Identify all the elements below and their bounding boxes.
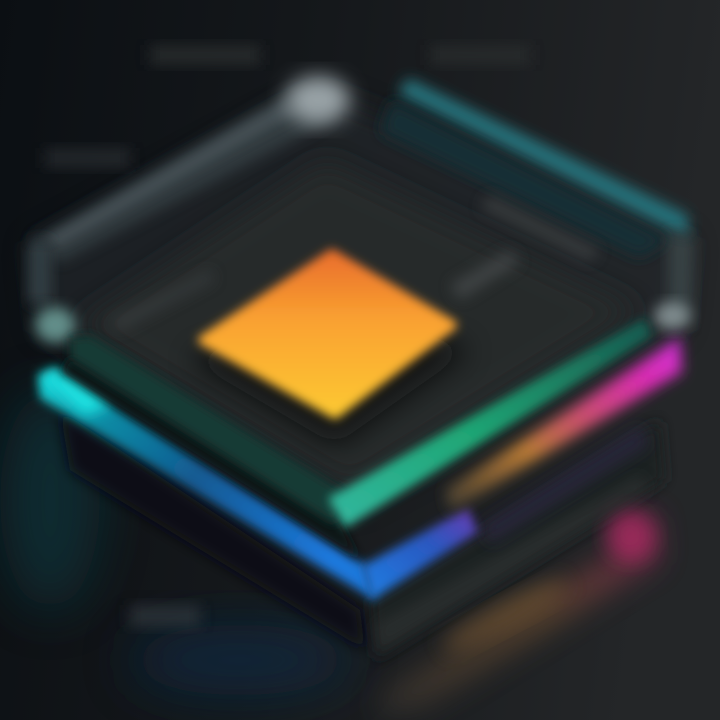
left glass edge [32,88,335,262]
white highlight [286,76,350,124]
layer: dark green left band [70,335,345,525]
layer: colourful lower right band [445,337,682,512]
faint inner lines [480,195,600,262]
layer: dark gap between green and blue [60,355,360,560]
reflection: lower stack [60,410,665,715]
faint blurred labels [45,45,530,627]
layer: blue and cyan band [38,368,478,600]
left corner glass [28,240,52,305]
panel: glass top plate [28,76,694,510]
shadow: under orange square [190,300,470,445]
teal top-right band [398,78,688,238]
right corner glass [668,232,694,325]
layer: green right band [328,318,652,528]
icon: orange square [203,254,452,414]
glow: left teal haze [0,390,100,610]
glow: lower blue haze [130,625,350,695]
